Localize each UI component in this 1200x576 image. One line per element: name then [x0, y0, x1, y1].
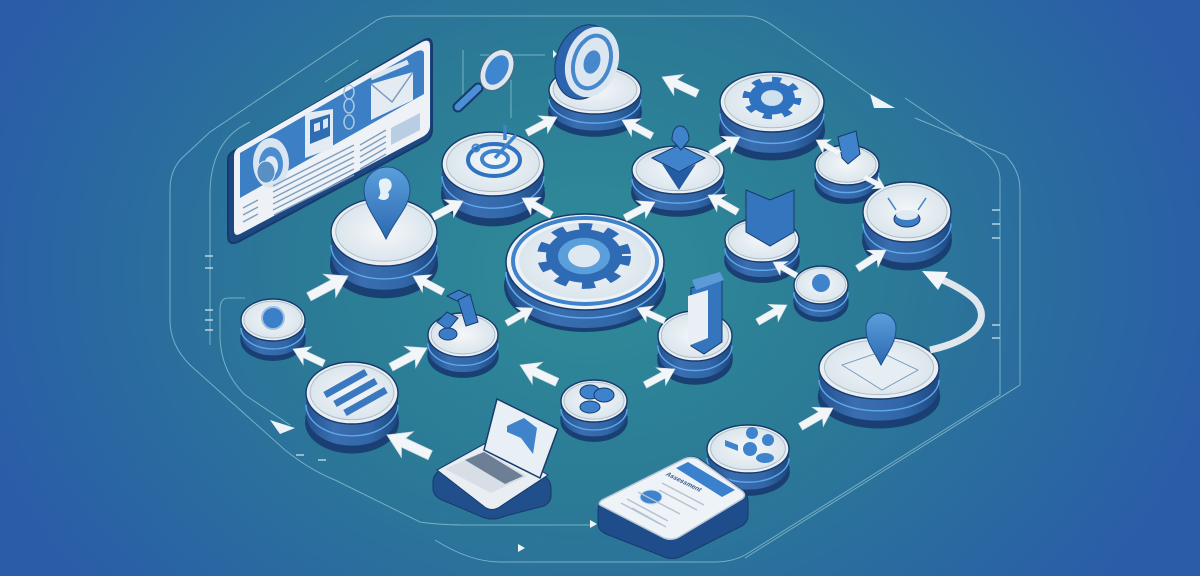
- icon: tablet: [838, 131, 860, 164]
- icon: magnifying glass: [458, 43, 521, 107]
- arrow: floating: [657, 67, 702, 104]
- node: laptop: [433, 399, 558, 519]
- badge: [640, 490, 662, 504]
- arrow: center to dart: [517, 189, 556, 224]
- arrowheads on thin lines: [270, 50, 895, 552]
- arrow: device to gear: [812, 133, 844, 161]
- node: document folder: [657, 272, 733, 385]
- arrow: laptop to bars: [381, 422, 436, 468]
- node: small cluster: [560, 380, 628, 442]
- arrows between nodes: [289, 67, 891, 468]
- icon: open box: [652, 126, 705, 190]
- arrow: bars to left: [289, 340, 328, 372]
- icon: cluster of cubes: [437, 290, 478, 340]
- text lines: [621, 483, 704, 527]
- icon: envelope: [371, 62, 413, 120]
- node: map pin platform: [818, 313, 940, 428]
- tick marks: [205, 210, 1000, 460]
- node: small device: [814, 131, 880, 204]
- arrow: bars to cubes: [385, 337, 433, 378]
- icon: main gear: [542, 227, 626, 285]
- icon: map grid: [842, 352, 918, 390]
- arrow: curved return: [922, 271, 981, 350]
- icon: location pin: [364, 167, 410, 239]
- arrow: box to gear: [706, 128, 745, 163]
- arrow: flag to box: [703, 186, 742, 221]
- icon: standing target: [546, 17, 628, 107]
- icon: dots: [812, 274, 830, 292]
- node: top target: [546, 17, 642, 137]
- node: small right: [793, 266, 849, 322]
- arrow: dart to top: [522, 108, 562, 142]
- icon: window card: [305, 109, 333, 158]
- icon: target with dart: [468, 125, 520, 176]
- icon: small gear: [746, 79, 798, 117]
- node: right lens: [862, 182, 952, 270]
- node: folded flag: [724, 190, 800, 283]
- icon: folded banner: [746, 190, 794, 246]
- node: central gear: [504, 214, 666, 332]
- arrow: center to box: [620, 193, 660, 227]
- arrow: cluster to folder: [640, 360, 680, 394]
- panel: dashboard: [228, 39, 432, 243]
- node: pyramid box: [631, 126, 725, 217]
- icon: cluster: [580, 385, 614, 413]
- icon: folder file: [688, 272, 724, 354]
- arrow: left to pin: [303, 265, 354, 308]
- arrow: apps to map: [795, 398, 838, 436]
- arrow: box to top: [617, 111, 657, 145]
- icon: text rings: [344, 85, 354, 129]
- icon: target badge: [253, 138, 289, 188]
- arrow: device to lens: [861, 171, 888, 194]
- icon: bars: [325, 372, 386, 413]
- node: target dart: [441, 125, 545, 226]
- heading text: Assessment: [664, 471, 704, 494]
- node: bars: [305, 362, 399, 453]
- arrow: folder to small: [753, 296, 792, 331]
- node: app icons: [706, 425, 790, 496]
- arrow: cubes to center: [502, 300, 538, 331]
- icon: round badge: [262, 307, 284, 329]
- arrow: small to flag: [769, 255, 801, 283]
- arrow: pin to dart: [428, 192, 468, 226]
- arrow: folder to center: [633, 300, 669, 329]
- text lines block: [243, 130, 386, 222]
- icon: ring: [888, 198, 926, 227]
- thin connector outlines: [170, 16, 1020, 562]
- icon: map pin: [866, 313, 896, 365]
- node: top right gear: [719, 72, 825, 160]
- icon: laptop: [445, 399, 558, 493]
- icon: app glyphs: [725, 427, 774, 463]
- arrow: cubes to pin: [408, 267, 448, 301]
- card: phone report: [598, 457, 748, 558]
- picture thumbnail: [391, 113, 420, 145]
- arrow: cluster to cubes: [515, 354, 562, 393]
- header bar: [676, 462, 735, 497]
- node: cubes: [427, 290, 499, 378]
- node: left small: [240, 299, 306, 361]
- arrow: small to lens: [852, 242, 891, 277]
- node: location pin: [330, 167, 438, 298]
